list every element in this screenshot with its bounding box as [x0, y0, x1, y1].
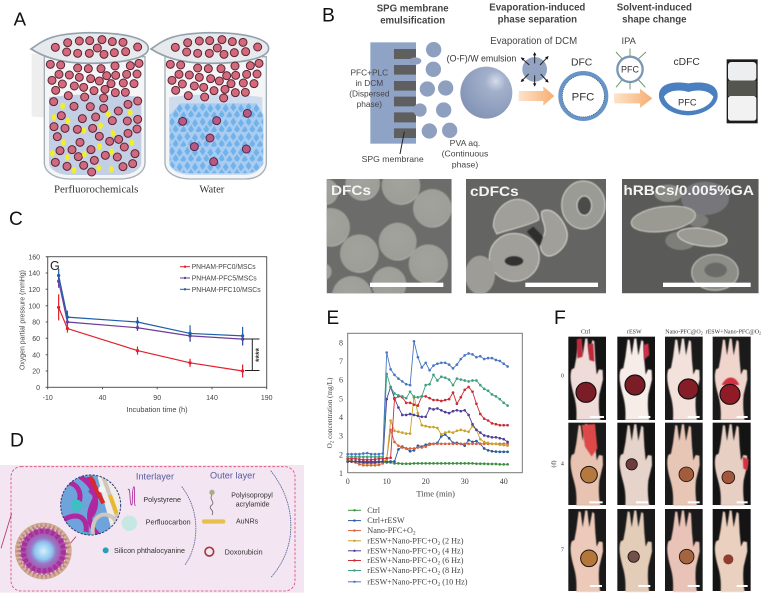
line: PNHAM-PFC5/MSCs	[59, 281, 243, 339]
column headers: rESW+Nano-PFC@O	[706, 330, 759, 336]
y-axis title: O	[326, 443, 334, 448]
concave cDFC shape: PFC	[678, 97, 697, 107]
IPA-treated capsule with inward arrows: PFC	[621, 65, 639, 75]
legend: 2	[413, 531, 416, 537]
icon: silicon phthalocyanine	[103, 547, 109, 553]
emulsion droplets	[409, 42, 457, 139]
icon: doxorubicin ring	[205, 547, 214, 556]
legend: 2	[437, 560, 440, 566]
legend: Ctrl+rESW	[367, 516, 405, 525]
x-axis tick labels	[346, 477, 508, 486]
pink background panel	[0, 465, 304, 593]
row labels: 0	[561, 374, 564, 380]
panel D: nanoparticle schematic	[0, 431, 304, 593]
vial photograph	[727, 59, 758, 123]
photo: rESW+Nano-PFC@O2 day 4	[713, 423, 751, 506]
photo: rESW day 7	[617, 509, 655, 592]
x-axis tick labels: 40	[99, 395, 106, 402]
panel A: beakers of oxygen dissolved in perfluorochemicals and water	[14, 8, 269, 196]
line: 4 Hz	[348, 387, 508, 462]
DFC shell with PFC core: PFC	[572, 91, 594, 103]
SPG membrane leader line	[400, 132, 404, 154]
x-axis tick labels: 30	[461, 477, 469, 486]
axis tick marks	[46, 257, 267, 389]
panel letter B: B	[322, 6, 335, 27]
legend	[348, 506, 468, 588]
line: Ctrl	[348, 462, 508, 464]
row labels: (d)	[550, 461, 557, 467]
row labels: 4	[561, 462, 564, 468]
y-axis tick labels: 1	[339, 469, 343, 478]
x-axis tick labels: 10	[383, 477, 391, 486]
panel C: oxygen partial pressure line chart	[9, 209, 273, 414]
error bars: PFC0	[59, 294, 243, 378]
column headers: 2	[759, 331, 761, 336]
label: PVA aq. continuous phase: PVA aq.	[450, 138, 480, 148]
red blood cells upper region, left beaker	[46, 36, 143, 102]
photo: Nano-PFC@O2 day 7	[665, 509, 703, 592]
SPG membrane block with pores	[370, 42, 416, 144]
y-axis tick labels: 0	[36, 385, 40, 392]
legend: (2 Hz)	[440, 536, 464, 545]
legend: PNHAM-PFC0/MSCs	[192, 264, 256, 271]
x-axis tick labels: 0	[346, 477, 350, 486]
step heading: solvent-induced shape change: shape change	[622, 14, 687, 25]
legend: rESW+Nano-PFC+O	[367, 546, 437, 555]
leader lines	[1, 513, 76, 552]
line: 6 Hz	[348, 387, 508, 460]
large emulsion droplet	[460, 67, 512, 119]
y-axis tick labels: 120	[28, 287, 40, 294]
column headers: Nano-PFC@O	[665, 330, 701, 336]
label: PFC+PLC dispersed phase: in DCM	[355, 78, 383, 88]
label: (O-F)/W emulsion: (O-F)/W emulsion	[447, 54, 516, 64]
y-axis title: Oxygen partial pressure (mmHg)	[20, 270, 26, 370]
y-axis tick labels: 60	[32, 336, 40, 343]
label: PFC+PLC dispersed phase: phase)	[357, 99, 382, 109]
x-axis tick labels: 20	[422, 477, 430, 486]
x-axis tick labels: 190	[261, 395, 273, 402]
panel letter C: C	[9, 209, 23, 230]
shadow behind left beaker	[32, 53, 44, 117]
concave cDFC shape	[659, 83, 718, 115]
column headers	[581, 330, 761, 336]
label: Evaporation of DCM: Evaporation of DCM	[490, 36, 577, 47]
legend: 2	[437, 582, 440, 588]
x-axis tick labels: -10	[43, 395, 53, 402]
IPA-treated capsule with inward arrows	[616, 49, 646, 89]
beaker: perfluorochemicals	[31, 33, 148, 179]
line: 8 Hz	[348, 374, 508, 457]
label: Silicon phthalocyanine: Silicon phthalocyanine	[114, 548, 185, 555]
process arrow 2	[614, 89, 652, 108]
legend: PNHAM-PFC10/MSCs	[192, 287, 261, 294]
y-axis tick labels: 20	[32, 368, 40, 376]
y-axis tick labels: 140	[28, 270, 40, 278]
label: PFC+PLC dispersed phase: (Dispersed	[349, 89, 390, 99]
row labels	[550, 374, 564, 554]
image label: hRBCs/0.005%GA: hRBCs/0.005%GA	[623, 182, 754, 198]
column headers: Ctrl	[581, 330, 591, 336]
legend: PNHAM-PFC5/MSCs	[192, 276, 257, 282]
panel E: O2 concentration line chart	[326, 308, 522, 588]
x-axis title: Time (min)	[416, 488, 455, 498]
photo: rESW day 4	[617, 423, 655, 506]
heading: Outer layer: Outer layer	[210, 471, 255, 481]
legend: 2	[437, 570, 440, 576]
x-axis title: Incubation time (h)	[126, 405, 188, 414]
y-axis tick labels: 40	[32, 352, 40, 360]
yellow PFC droplets	[50, 103, 134, 174]
icon: gold nanorod	[202, 519, 225, 524]
label: PVA aq. continuous phase: phase)	[452, 159, 478, 169]
process arrow 1	[519, 86, 554, 106]
error bars: PFC5	[59, 275, 243, 346]
legend: rESW+Nano-PFC+O	[367, 556, 437, 565]
label: Water: Water	[199, 185, 225, 196]
legend: (6 Hz)	[440, 556, 464, 565]
scale bar	[370, 283, 443, 287]
legend: 2	[437, 541, 440, 547]
photo: rESW day 0	[617, 337, 655, 420]
magnified particle inset	[60, 474, 122, 536]
step heading: evaporation-induced phase separation: Evaporation-induced	[489, 2, 585, 13]
y-axis tick labels: 7	[339, 357, 343, 366]
legend: (4 Hz)	[440, 546, 464, 555]
label: DFC: DFC	[571, 57, 593, 68]
dashed rounded border	[11, 467, 295, 591]
line: Nano-PFC+O2	[348, 430, 508, 465]
line: PNHAM-PFC0/MSCs	[59, 307, 243, 371]
legend	[180, 264, 261, 294]
y-axis tick labels: 6	[339, 376, 343, 384]
scale bar	[525, 283, 598, 287]
chart frame	[48, 257, 267, 387]
photo: rESW+Nano-PFC@O2 day 0	[713, 337, 751, 420]
label: Doxorubicin: Doxorubicin	[225, 549, 263, 556]
label: PVA aq. continuous phase: (Continuous	[442, 149, 489, 159]
label: IPA: IPA	[621, 36, 637, 46]
SEM image: hRBCs/0.005%GA	[622, 179, 759, 293]
label: Perfluorochemicals: Perfluorochemicals	[54, 185, 138, 196]
photo: Ctrl day 7	[568, 509, 606, 592]
step heading: solvent-induced shape change: Solvent-induced	[617, 2, 692, 13]
photo: rESW+Nano-PFC@O2 day 7	[713, 509, 751, 592]
icon: polystyrene coil	[128, 487, 135, 506]
evaporating droplet with radial arrows	[521, 52, 549, 87]
row labels: 7	[561, 548, 564, 554]
legend: 2	[437, 551, 440, 557]
panel F: paw wound photo grid	[550, 308, 761, 592]
y-axis tick labels: 80	[32, 320, 40, 326]
panel letter F: F	[554, 308, 566, 329]
y-axis title: 2	[330, 440, 336, 443]
line: 2 Hz	[348, 396, 508, 463]
beaker: water	[151, 33, 269, 179]
line: 10 Hz	[348, 341, 508, 454]
y-axis tick labels: 8	[339, 338, 343, 348]
label: cDFC: cDFC	[673, 57, 700, 68]
y-axis tick labels: 5	[339, 394, 343, 403]
icon: polyisopropyl acrylamide chain	[209, 490, 215, 515]
panel B: SEM micrographs	[326, 179, 759, 294]
red blood cells in PFC liquid	[50, 97, 142, 176]
legend: Nano-PFC+O	[367, 526, 413, 535]
y-axis tick labels: 3	[339, 432, 343, 440]
legend: rESW+Nano-PFC+O	[367, 577, 437, 586]
icon: perfluorocarbon sphere	[122, 516, 137, 531]
photo: Ctrl day 0	[568, 337, 606, 420]
significance bracket	[244, 339, 264, 370]
y-axis tick labels: 4	[339, 413, 343, 422]
curved layer dividers	[182, 471, 291, 577]
x-axis tick labels: 40	[500, 477, 508, 486]
label: Perfluocarbon: Perfluocarbon	[146, 519, 191, 526]
step heading: evaporation-induced phase separation: phase separation	[498, 14, 577, 25]
SEM image: DFCs	[326, 179, 452, 294]
panel B: fabrication schematic for DFC and cDFC	[322, 2, 758, 169]
label: Polyisopropyl acrylamide: acrylamide	[236, 502, 270, 509]
image label: DFCs: DFCs	[331, 182, 371, 198]
legend: Ctrl	[367, 506, 381, 515]
error bars: PFC10	[59, 269, 243, 345]
photo: Ctrl day 4	[568, 423, 606, 506]
significance bracket: ****	[254, 348, 264, 362]
chart frame	[348, 333, 522, 473]
label: AuNRs: AuNRs	[236, 519, 259, 526]
scale bar	[663, 283, 751, 287]
legend: rESW+Nano-PFC+O	[367, 566, 437, 575]
SEM image: cDFCs	[465, 179, 606, 294]
legend: (10 Hz)	[440, 577, 468, 586]
line: PNHAM-PFC10/MSCs	[59, 276, 243, 336]
y-axis tick labels: 2	[339, 450, 343, 459]
column headers: 2	[701, 331, 703, 336]
x-axis tick labels: 140	[206, 395, 218, 402]
step heading: SPG membrane emulsification: emulsification	[380, 15, 445, 26]
y-axis title: concentration (mg/L)	[326, 377, 334, 441]
photo: Nano-PFC@O2 day 0	[665, 337, 703, 420]
DFC shell with PFC core	[560, 73, 606, 119]
label: Polystyrene: Polystyrene	[143, 497, 181, 504]
panel letter E: E	[326, 308, 339, 329]
y-axis tick labels	[339, 338, 343, 478]
data series	[348, 341, 508, 465]
label: PFC+PLC dispersed phase: PFC+PLC	[350, 68, 388, 78]
label: SPG membrane: SPG membrane	[362, 154, 424, 164]
y-axis tick labels: 100	[28, 304, 40, 310]
x-axis tick labels: 90	[153, 395, 161, 402]
panel letter D: D	[10, 431, 24, 452]
photo: Nano-PFC@O2 day 4	[665, 423, 703, 506]
data series	[59, 269, 243, 378]
sparse red blood cells in water	[179, 109, 251, 166]
step heading: SPG membrane emulsification: SPG membrane	[377, 3, 449, 14]
legend: rESW+Nano-PFC+O	[367, 536, 437, 545]
legend: (8 Hz)	[440, 566, 464, 575]
nanoparticle full view	[15, 523, 72, 579]
panel letter A: A	[14, 8, 27, 29]
heading: Interlayer: Interlayer	[136, 471, 174, 481]
line: Ctrl+rESW	[348, 435, 508, 462]
sub-label G: G	[50, 259, 60, 273]
y-axis tick labels: 160	[28, 254, 40, 262]
column headers: rESW	[627, 330, 642, 336]
red blood cells upper region, right beaker	[166, 36, 263, 102]
image label: cDFCs: cDFCs	[470, 183, 519, 199]
label: Polyisopropyl acrylamide: Polyisopropyl	[231, 492, 273, 499]
